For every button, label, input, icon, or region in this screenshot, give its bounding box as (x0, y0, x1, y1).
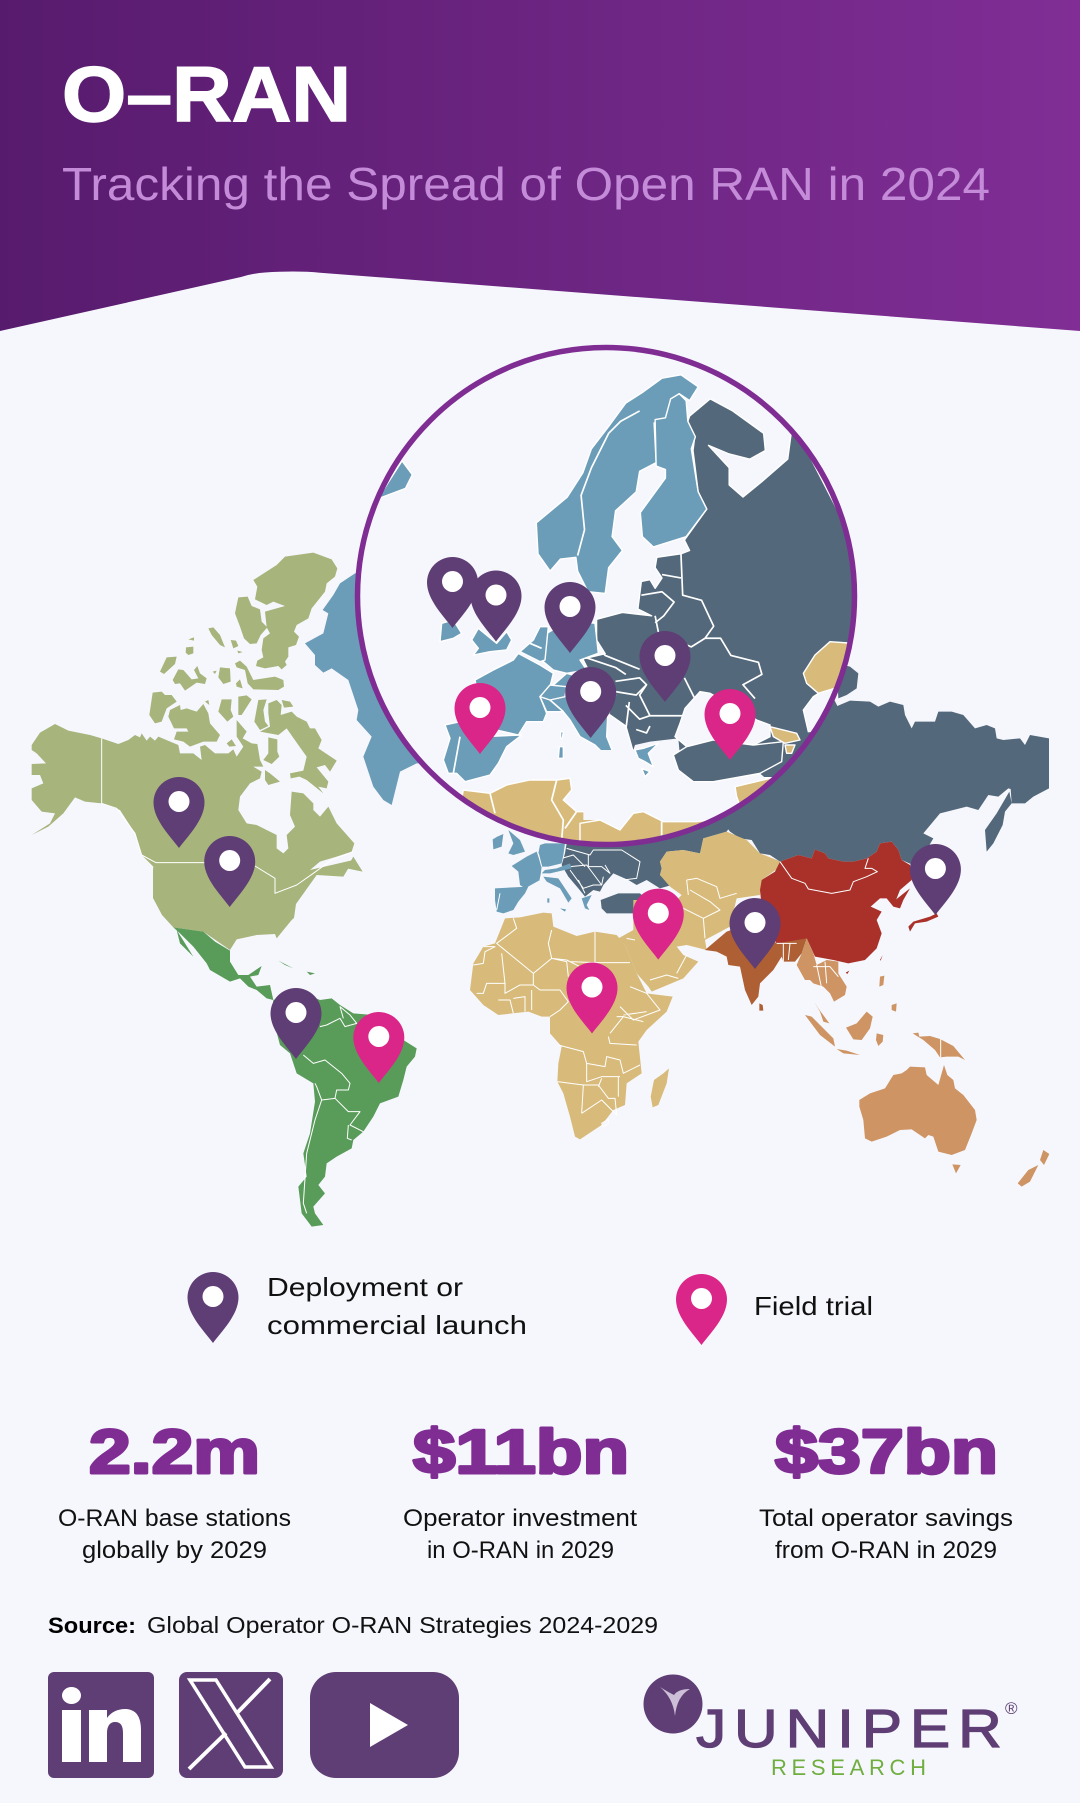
region: East and South Asia (705, 842, 938, 1011)
legend: deployment label: commercial launch (267, 1310, 527, 1340)
world map (32, 347, 1049, 1227)
stat: operator savings: from O-RAN in 2029 (775, 1537, 997, 1564)
pin: Japan (910, 844, 961, 915)
logo registered mark: ® (1005, 1699, 1018, 1718)
region: Eastern Europe and Russia (583, 399, 860, 778)
region: Caucasus (770, 727, 800, 753)
logo mark (644, 1674, 702, 1734)
logo subtitle: RESEARCH (771, 1755, 926, 1780)
region: North Africa (462, 778, 595, 840)
legend: deployment pin (188, 1272, 238, 1343)
region: Iceland (378, 461, 412, 499)
region: Maritime Asia and Oceania (805, 976, 1049, 1187)
region: Middle East corner (734, 778, 770, 802)
pin: Romania (640, 631, 690, 702)
stat: base stations: 2.2m (89, 1418, 260, 1487)
region: Latin America (173, 927, 417, 1227)
region: Africa (470, 913, 673, 1139)
legend: field trial pin (676, 1274, 727, 1345)
stat: operator investment: in O-RAN in 2029 (427, 1537, 614, 1564)
inset background (357, 347, 855, 845)
legend (188, 1272, 873, 1345)
region: Mediterranean sea (583, 738, 768, 822)
subtitle: Tracking the Spread of Open RAN in 2024 (62, 158, 990, 210)
stat: operator savings: Total operator savings (759, 1505, 1013, 1532)
region: Russia east (697, 657, 1049, 867)
pin: Central Africa (566, 962, 618, 1034)
logo wordmark: JUNIPER (696, 1699, 1002, 1759)
stat: operator savings: $37bn (775, 1418, 998, 1487)
stat: base stations: globally by 2029 (82, 1537, 267, 1564)
icon: X (179, 1672, 283, 1778)
icon: LinkedIn (48, 1672, 154, 1778)
pin: Colombia (270, 988, 322, 1059)
logo: Juniper Research (644, 1674, 1018, 1780)
inset map (378, 375, 860, 857)
source line: Global Operator O-RAN Strategies 2024-2029 (147, 1612, 658, 1638)
stat: operator investment: Operator investment (403, 1505, 637, 1532)
pin: Turkey (704, 689, 756, 760)
legend: deployment label (267, 1272, 527, 1340)
region: Turkey (673, 740, 783, 782)
legend: deployment label: Deployment or (267, 1272, 463, 1302)
region: North America (32, 553, 363, 952)
icon: YouTube (310, 1672, 459, 1778)
region: China (760, 842, 912, 963)
europe inset circle (357, 347, 860, 857)
region: Finland (640, 394, 707, 547)
pin: Spain (454, 683, 506, 754)
region: Greece (635, 743, 658, 777)
region: Africa, Middle East and small Europe (470, 763, 785, 1139)
pin: Canada (154, 777, 204, 848)
region: Greenland (305, 573, 453, 805)
region: India (705, 923, 807, 1005)
pin: Germany (544, 582, 596, 653)
pin: Italy (565, 667, 616, 738)
stat: operator investment: $11bn (413, 1418, 629, 1487)
region: Mainland South-East Asia (797, 938, 847, 1002)
legend: field trial label: Field trial (754, 1291, 873, 1321)
pin: India (730, 898, 780, 969)
stat: operator savings (759, 1418, 1013, 1564)
region: Western Europe small (493, 830, 592, 913)
stat: base stations: O-RAN base stations (58, 1505, 291, 1532)
region: Madagascar (651, 1068, 669, 1107)
region: Norway and Sweden (536, 375, 698, 593)
source line: Source: (48, 1613, 136, 1638)
region: Western Europe (440, 620, 613, 782)
pin: Saudi Arabia (633, 889, 684, 960)
region: Russia west and Balkans (562, 763, 737, 897)
region: Turkey small (601, 893, 643, 913)
pin: UK 2 (470, 570, 522, 642)
pin: USA (204, 836, 255, 907)
inset ring (358, 348, 854, 844)
region: Kazakhstan (803, 642, 853, 693)
region: Caspian Sea (802, 690, 834, 732)
stat: operator investment (403, 1418, 637, 1564)
region: Middle East and Central Asia (618, 832, 785, 992)
region: Black Sea (675, 692, 770, 747)
region: Korea and Japan (846, 888, 938, 974)
pin: Brazil (353, 1012, 404, 1083)
region: Libya and Egypt coast (579, 811, 706, 840)
stat: base stations (58, 1418, 291, 1564)
title: O–RAN (62, 50, 351, 138)
pin: UK 1 (427, 557, 478, 628)
header banner (0, 0, 1080, 331)
